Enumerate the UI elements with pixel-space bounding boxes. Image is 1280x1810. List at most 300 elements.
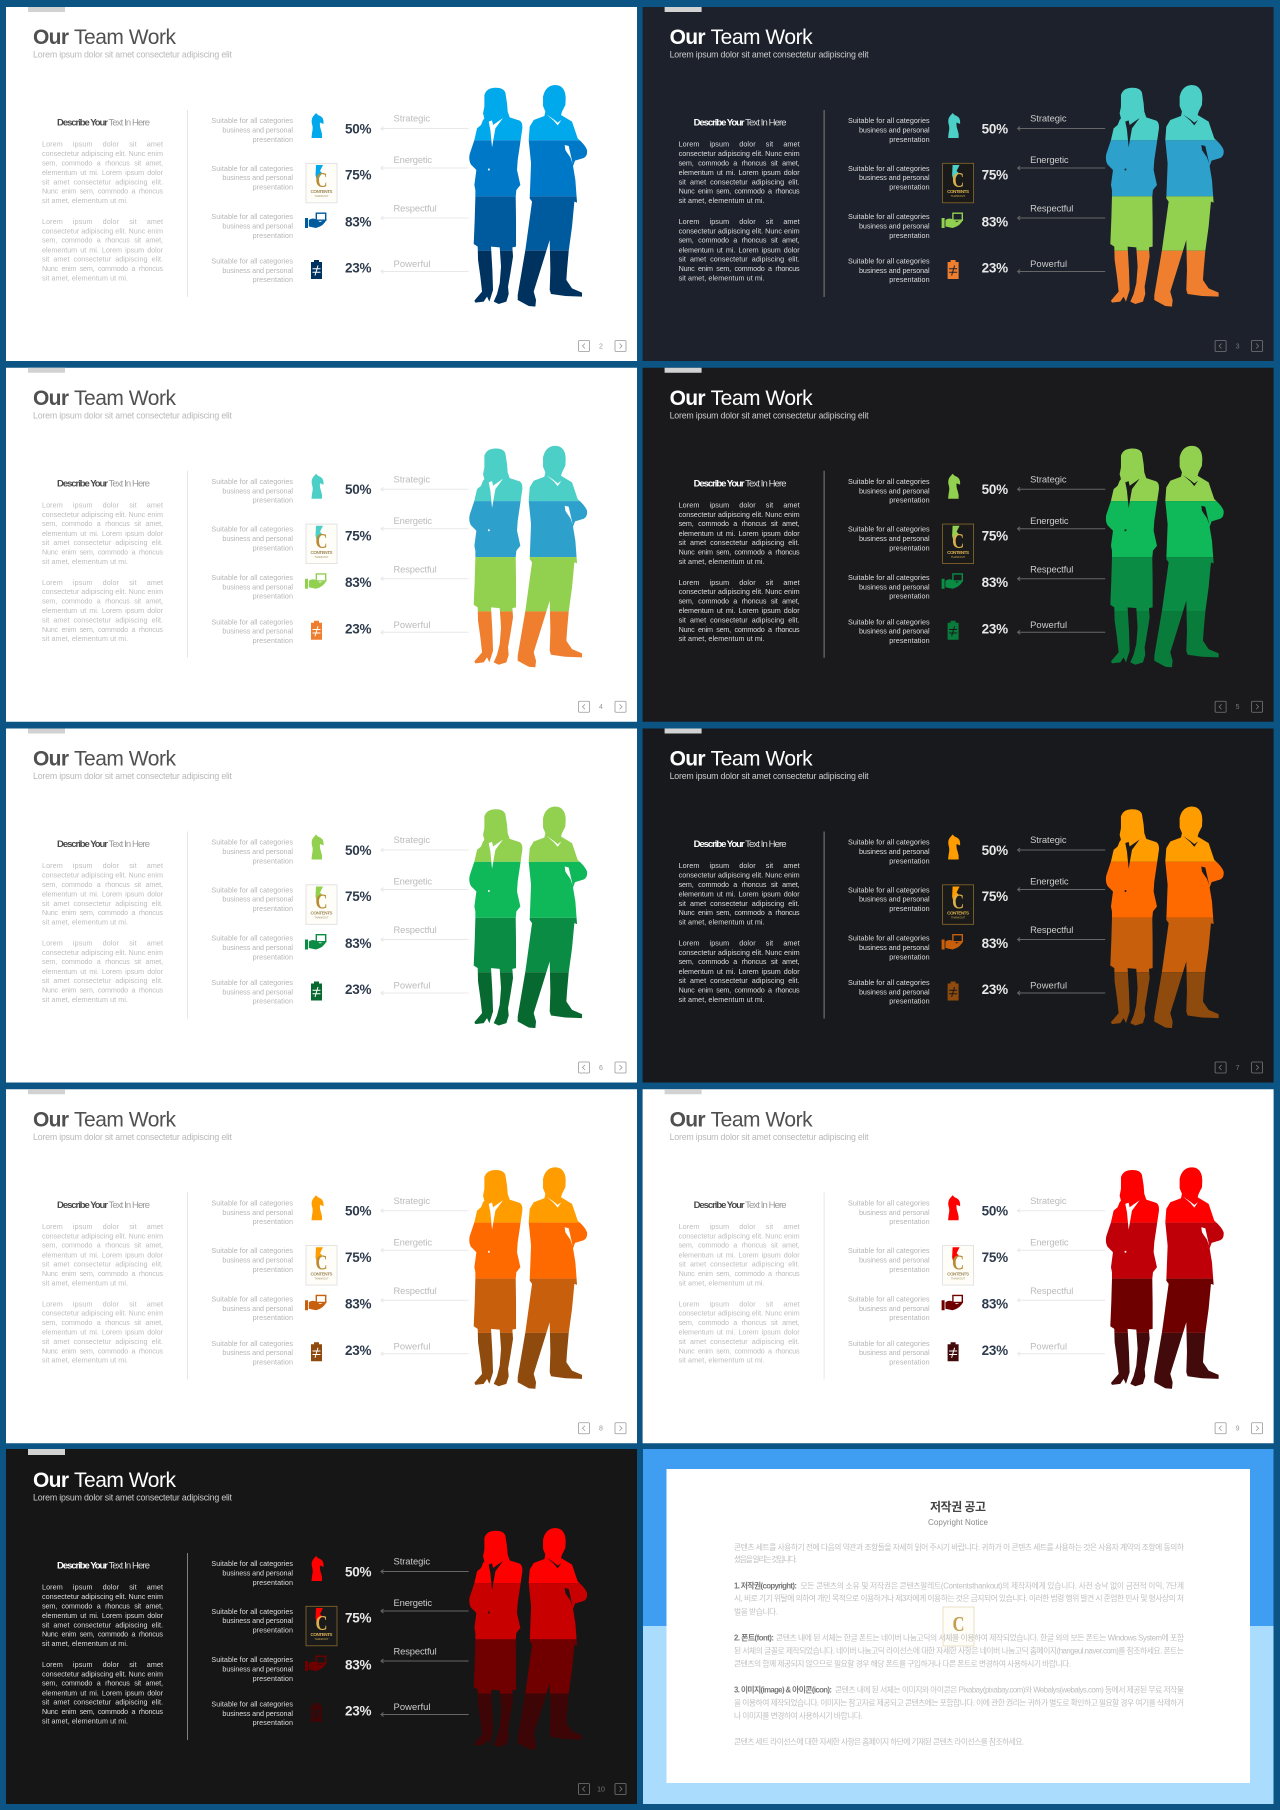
label: Energetic <box>1030 515 1069 526</box>
heading: Text In Here <box>108 1560 150 1572</box>
text block: sit amet consectetur adipiscing elit. <box>42 899 163 908</box>
heading: Text In Here <box>108 839 150 850</box>
text block: Nunc enim sem, commodo a rhoncus <box>42 1707 163 1716</box>
icon: battery <box>948 621 959 640</box>
text block: sit amet, elementum ut mi. <box>42 1639 128 1648</box>
icon: logo: CONTENTS <box>947 1271 969 1276</box>
title: Our <box>33 1469 69 1492</box>
text block: sem, commodo a rhoncus sit amet, <box>42 1601 163 1610</box>
icon: knight <box>312 113 324 138</box>
text block <box>679 500 800 643</box>
text block: sit amet consectetur adipiscing elit. <box>42 1620 163 1629</box>
row: Strategic <box>211 473 469 505</box>
text block <box>42 500 164 643</box>
text block: Lorem ipsum dolor sit amet <box>42 140 163 148</box>
icon: logo: C <box>316 890 328 914</box>
label: Respectful <box>1030 924 1073 935</box>
icon: logo: THANKOUT <box>951 916 966 920</box>
description <box>848 885 930 913</box>
heading: Text In Here <box>745 118 787 128</box>
subtitle: Lorem ipsum dolor sit amet consectetur adipiscing elit <box>670 410 869 420</box>
icon: hand <box>305 213 327 228</box>
text block: sit amet, elementum ut mi. <box>679 1278 765 1287</box>
text block: Lorem ipsum dolor sit amet <box>42 500 163 509</box>
pagination: 7 <box>1236 1065 1240 1072</box>
title: Our <box>670 26 706 49</box>
icon: knight <box>948 113 960 138</box>
text block: elementum ut mi. Lorem ipsum dolor <box>42 606 164 615</box>
icon: battery <box>948 1342 959 1361</box>
figure: businesspeople silhouettes <box>1106 446 1224 668</box>
text block: sem, commodo a rhoncus sit amet, <box>42 519 163 528</box>
percent: 83% <box>345 1297 372 1312</box>
description: presentation <box>253 1357 293 1366</box>
percent: 75% <box>982 168 1008 183</box>
label: Powerful <box>394 258 430 269</box>
row: Powerful <box>848 978 1105 1006</box>
row: Energetic <box>211 515 469 564</box>
arrow <box>381 527 469 531</box>
label: Powerful <box>1030 980 1067 990</box>
title: Our <box>670 387 706 410</box>
notice section 2: 2. 폰트(font): <box>734 1634 774 1643</box>
label: Respectful <box>394 1285 437 1296</box>
label: Respectful <box>394 203 437 214</box>
label: Energetic <box>394 1236 432 1247</box>
text block: sem, commodo a rhoncus sit amet, <box>679 957 800 966</box>
notice sheet <box>666 1469 1250 1783</box>
title: Team Work <box>74 387 176 410</box>
panel: slide 2 <box>6 7 637 361</box>
icon: hand <box>942 1295 963 1310</box>
description: Suitable for all categories <box>848 617 930 626</box>
text block: Nunc enim sem, commodo a rhoncus <box>679 625 800 634</box>
text block: sem, commodo a rhoncus sit amet, <box>679 158 800 167</box>
row: Respectful <box>848 924 1105 961</box>
arrow <box>381 1352 469 1356</box>
text block: Lorem ipsum dolor sit amet <box>42 1660 163 1669</box>
description: business and personal <box>859 534 930 543</box>
icon: knight <box>948 1195 960 1220</box>
pagination: 5 <box>1236 704 1240 711</box>
text block: sit amet consectetur adipiscing elit. <box>42 255 163 264</box>
description: presentation <box>889 997 930 1006</box>
panel: slide 8 <box>6 1089 637 1443</box>
text block: Lorem ipsum dolor sit amet <box>679 140 800 148</box>
heading: Text In Here <box>108 118 150 128</box>
description: Suitable for all categories <box>211 525 293 534</box>
icon: logo: C <box>316 1250 328 1274</box>
description: business and personal <box>222 1616 293 1625</box>
icon: hand <box>942 213 963 228</box>
text block: consectetur adipiscing elit. Nunc enim <box>42 870 163 880</box>
label: Strategic <box>394 473 430 484</box>
description: business and personal <box>222 173 293 182</box>
text block: Nunc enim sem, commodo a rhoncus <box>42 547 163 556</box>
panel: slide 5 <box>643 368 1274 722</box>
title: Team Work <box>74 1108 176 1131</box>
arrow <box>381 1712 469 1716</box>
description: Suitable for all categories <box>211 838 293 847</box>
text block: sit amet consectetur adipiscing elit. <box>42 1337 163 1346</box>
title: Team Work <box>711 387 813 410</box>
subtitle: Lorem ipsum dolor sit amet consectetur adipiscing elit <box>33 771 233 781</box>
icon: knight <box>948 834 960 860</box>
row: Respectful <box>211 924 469 961</box>
icon: logo: CONTENTS <box>310 1632 332 1637</box>
text block: consectetur adipiscing elit. Nunc enim <box>42 510 163 519</box>
label: Strategic <box>1030 112 1067 124</box>
description: Suitable for all categories <box>211 1655 293 1664</box>
notice intro: 콘텐츠 세트를 사용하기 전에 다음의 약관과 조항들을 자세히 읽어 주시기 바랍니다. 귀하가 이 콘텐츠 세트를 사용하는 것은 사용자 계약의 조항에 동의하 <box>734 1542 1184 1552</box>
title: Our <box>33 748 69 770</box>
arrow <box>1018 1209 1105 1213</box>
text block: sit amet, elementum ut mi. <box>42 995 128 1004</box>
description: business and personal <box>222 1568 293 1578</box>
label: Energetic <box>394 154 432 165</box>
notice section 1: 모든 콘텐츠의 소유 및 저작권은 콘텐츠팔레트(Contentsthankout)의 제작자에게 있습니다. 사전 승낙 없이 금전적 이익, 7단계 <box>800 1581 1184 1591</box>
subtitle: Lorem ipsum dolor sit amet consectetur adipiscing elit <box>670 1132 869 1142</box>
label: Respectful <box>1030 563 1073 574</box>
label: Strategic <box>1030 1195 1067 1206</box>
pagination <box>578 1062 626 1073</box>
arrow <box>381 1298 469 1302</box>
pagination: 10 <box>597 1786 605 1793</box>
icon: battery <box>948 982 959 1000</box>
panel: copyright notice <box>643 1449 1274 1804</box>
description: Suitable for all categories <box>211 212 293 221</box>
description: presentation <box>889 1313 930 1322</box>
row: Energetic <box>211 1597 469 1646</box>
description <box>211 838 293 865</box>
row: Energetic <box>211 876 469 924</box>
icon: logo <box>943 885 974 924</box>
panel: slide 7 <box>643 728 1274 1082</box>
title: Our <box>33 26 69 49</box>
text block: Nunc enim sem, commodo a rhoncus <box>679 264 800 273</box>
row: Respectful <box>848 563 1105 601</box>
text block: sem, commodo a rhoncus sit amet, <box>42 158 163 167</box>
arrow <box>1018 848 1105 852</box>
icon: knight <box>312 474 324 499</box>
icon: logo: THANKOUT <box>314 555 329 559</box>
text block: Lorem ipsum dolor sit amet <box>679 500 800 509</box>
description: business and personal <box>859 987 930 996</box>
slide background <box>6 7 637 361</box>
arrow <box>381 270 469 274</box>
arrow <box>1018 630 1105 634</box>
text block: Nunc enim sem, commodo a rhoncus <box>42 1630 163 1639</box>
text block: sit amet, elementum ut mi. <box>42 273 128 282</box>
heading <box>57 839 150 850</box>
text block: consectetur adipiscing elit. Nunc enim <box>42 948 163 957</box>
text block: sem, commodo a rhoncus sit amet, <box>679 1318 800 1327</box>
label: Energetic <box>1030 876 1069 886</box>
arrow <box>381 1248 469 1252</box>
percent: 50% <box>345 1564 372 1579</box>
icon: logo: C <box>952 1250 964 1274</box>
text block: sem, commodo a rhoncus sit amet, <box>679 1241 800 1250</box>
title: Team Work <box>711 26 813 49</box>
text block: sit amet, elementum ut mi. <box>679 557 765 566</box>
row: Strategic <box>848 1195 1105 1226</box>
description: Suitable for all categories <box>211 1294 293 1303</box>
text block: sit amet consectetur adipiscing elit. <box>679 255 800 264</box>
description: business and personal <box>222 1709 293 1718</box>
row: Energetic <box>848 154 1105 203</box>
text block: elementum ut mi. Lorem ipsum dolor <box>679 245 800 254</box>
notice section 1: 벌을 받습니다. <box>734 1607 778 1617</box>
arrow <box>1018 216 1105 220</box>
description <box>848 1198 930 1226</box>
icon: logo <box>306 1246 337 1285</box>
heading: Text In Here <box>108 478 150 489</box>
top tab <box>28 368 65 373</box>
description: presentation <box>889 182 930 192</box>
arrow <box>381 577 469 581</box>
text block: Nunc enim sem, commodo a rhoncus <box>679 908 800 917</box>
description: Suitable for all categories <box>848 838 930 847</box>
text block: sem, commodo a rhoncus sit amet, <box>679 596 800 605</box>
percent: 50% <box>345 482 372 497</box>
text block: sem, commodo a rhoncus sit amet, <box>42 880 163 889</box>
text block: consectetur adipiscing elit. Nunc enim <box>42 587 163 596</box>
text block: Lorem ipsum dolor sit amet <box>42 1299 163 1308</box>
text block: consectetur adipiscing elit. Nunc enim <box>679 1309 800 1318</box>
label: Strategic <box>394 1195 430 1206</box>
description <box>848 617 930 645</box>
description <box>211 164 293 192</box>
icon: logo: THANKOUT <box>314 1637 329 1641</box>
description: presentation <box>253 592 293 601</box>
text block: sit amet consectetur adipiscing elit. <box>42 177 163 186</box>
text block: consectetur adipiscing elit. Nunc enim <box>42 1592 163 1601</box>
row: Energetic <box>211 1236 469 1285</box>
top tab <box>28 1449 65 1455</box>
description: business and personal <box>859 266 930 275</box>
text block: consectetur adipiscing elit. Nunc enim <box>679 587 800 596</box>
description: business and personal <box>859 486 930 495</box>
description: presentation <box>253 182 293 192</box>
description <box>848 1294 930 1322</box>
description: business and personal <box>222 895 293 904</box>
description: Suitable for all categories <box>211 1339 293 1348</box>
text block: sem, commodo a rhoncus sit amet, <box>42 236 163 245</box>
pagination <box>1215 701 1263 712</box>
pagination: 4 <box>599 704 603 711</box>
notice section 1: 1. 저작권(copyright): <box>734 1581 797 1591</box>
row: Powerful <box>211 617 469 645</box>
notice intro <box>734 1542 1184 1564</box>
description: Suitable for all categories <box>211 116 293 125</box>
text block: sem, commodo a rhoncus sit amet, <box>42 957 163 966</box>
row: Respectful <box>211 1285 469 1322</box>
text block: Nunc enim sem, commodo a rhoncus <box>42 264 163 273</box>
icon: logo: C <box>316 529 328 553</box>
percent: 23% <box>345 982 372 997</box>
icon: logo: CONTENTS <box>310 550 332 555</box>
percent: 23% <box>982 261 1008 276</box>
description <box>848 256 930 284</box>
arrow <box>381 848 469 852</box>
description: Suitable for all categories <box>848 978 930 987</box>
panel: slide 9 <box>643 1089 1274 1443</box>
slide background <box>643 7 1274 361</box>
text block <box>679 861 800 1004</box>
arrow <box>1018 166 1105 170</box>
description <box>211 617 293 645</box>
description: presentation <box>253 1626 293 1634</box>
description: business and personal <box>222 1255 293 1264</box>
description: Suitable for all categories <box>211 1198 293 1207</box>
percent: 23% <box>982 621 1008 636</box>
row: Respectful <box>211 1646 469 1683</box>
text block: Lorem ipsum dolor sit amet <box>679 578 800 587</box>
text block: sit amet consectetur adipiscing elit. <box>42 615 163 624</box>
description: business and personal <box>222 582 293 591</box>
icon: logo: THANKOUT <box>314 1276 329 1280</box>
text block <box>42 1582 164 1725</box>
label: Powerful <box>1030 1340 1067 1351</box>
title: Team Work <box>74 26 176 49</box>
slide background <box>6 728 637 1082</box>
percent: 50% <box>982 843 1008 858</box>
arrow <box>1018 270 1105 274</box>
heading <box>57 1200 150 1211</box>
description: presentation <box>253 231 293 240</box>
icon: logo <box>306 1606 337 1646</box>
description: business and personal <box>859 1208 930 1217</box>
icon: logo <box>943 524 974 564</box>
description: Suitable for all categories <box>211 934 293 943</box>
text block: elementum ut mi. Lorem ipsum dolor <box>679 967 800 976</box>
description: Suitable for all categories <box>211 978 293 987</box>
slide background <box>6 368 637 722</box>
text block <box>42 140 164 282</box>
description: business and personal <box>222 534 293 543</box>
text block: Lorem ipsum dolor sit amet <box>42 217 163 226</box>
heading <box>694 839 787 850</box>
arrow <box>1018 527 1105 531</box>
icon: logo: CONTENTS <box>947 910 969 916</box>
label: Powerful <box>394 980 430 990</box>
icon: logo: THANKOUT <box>314 916 329 920</box>
icon: hand <box>305 935 327 950</box>
figure: businesspeople silhouettes <box>469 446 588 668</box>
text block: sit amet consectetur adipiscing elit. <box>679 615 800 624</box>
heading <box>57 1560 150 1572</box>
description: presentation <box>889 1217 930 1226</box>
icon: battery <box>311 621 322 640</box>
icon: logo: C <box>952 890 964 914</box>
label: Respectful <box>394 924 437 935</box>
text block: Nunc enim sem, commodo a rhoncus <box>42 1269 163 1278</box>
percent: 83% <box>982 936 1008 951</box>
arrow <box>381 991 469 995</box>
description <box>211 573 293 601</box>
description <box>211 934 293 961</box>
description: business and personal <box>859 895 930 904</box>
panel: slide 10 <box>6 1449 637 1804</box>
text block: sem, commodo a rhoncus sit amet, <box>42 1679 163 1688</box>
row: Powerful <box>211 978 469 1006</box>
pagination <box>1215 340 1263 352</box>
title: Team Work <box>711 748 813 770</box>
row: Strategic <box>211 1195 469 1226</box>
notice section 3: 콘텐츠 내에 된 서체는 이미지와 아이콘은 Pixabay(pixabay.com)와 Webalys(webalys.com) 등에서 제공된 무료 저작물 <box>835 1684 1184 1694</box>
icon: logo: C <box>316 168 328 192</box>
subtitle: Lorem ipsum dolor sit amet consectetur adipiscing elit <box>33 1492 233 1502</box>
icon: knight <box>312 1195 324 1220</box>
label: Powerful <box>1030 619 1067 630</box>
text block: elementum ut mi. Lorem ipsum dolor <box>42 1328 164 1337</box>
description: presentation <box>889 231 930 240</box>
icon: logo: CONTENTS <box>947 189 969 194</box>
label: Respectful <box>1030 203 1073 214</box>
arrow <box>381 487 469 491</box>
text block: Nunc enim sem, commodo a rhoncus <box>42 625 163 634</box>
top tab <box>665 7 702 12</box>
text block: sem, commodo a rhoncus sit amet, <box>679 236 800 245</box>
arrow <box>381 1570 469 1574</box>
description: presentation <box>253 904 293 913</box>
label: Strategic <box>1030 473 1067 484</box>
text block: Nunc enim sem, commodo a rhoncus <box>42 908 163 917</box>
row: Strategic <box>848 473 1105 505</box>
pagination: 8 <box>599 1426 603 1433</box>
heading: Describe Your <box>694 118 745 128</box>
icon: hand <box>942 935 963 950</box>
row: Energetic <box>848 1236 1105 1285</box>
percent: 75% <box>345 168 372 183</box>
row: Respectful <box>848 1285 1105 1322</box>
description: Suitable for all categories <box>211 256 293 266</box>
notice section 3: 3. 이미지(image) & 아이콘(icon): <box>734 1684 832 1694</box>
description <box>848 978 930 1006</box>
text block: Nunc enim sem, commodo a rhoncus <box>679 187 800 196</box>
icon: logo <box>943 1246 974 1285</box>
arrow <box>381 216 469 220</box>
text block: Lorem ipsum dolor sit amet <box>42 1582 163 1592</box>
label: Energetic <box>1030 1236 1069 1247</box>
icon: logo: C <box>952 529 964 553</box>
icon: knight <box>312 1556 324 1581</box>
label: Powerful <box>394 1701 430 1712</box>
icon: logo: THANKOUT <box>951 194 966 198</box>
text block: elementum ut mi. Lorem ipsum dolor <box>42 890 164 898</box>
percent: 75% <box>345 1250 372 1265</box>
description <box>211 116 293 144</box>
text block: sit amet consectetur adipiscing elit. <box>42 538 163 547</box>
heading: Text In Here <box>745 839 787 850</box>
text block: elementum ut mi. Lorem ipsum dolor <box>679 1328 800 1337</box>
label: Energetic <box>394 1597 432 1608</box>
description: presentation <box>889 543 930 552</box>
panel: slide 3 <box>643 7 1274 361</box>
description <box>211 477 293 505</box>
description: Suitable for all categories <box>211 1607 293 1616</box>
row: Respectful <box>211 563 469 601</box>
label: Strategic <box>1030 834 1067 845</box>
row: Powerful <box>848 617 1105 645</box>
description <box>848 525 930 552</box>
label: Strategic <box>394 1556 430 1566</box>
description: business and personal <box>859 943 930 952</box>
description: presentation <box>253 496 293 505</box>
text block: sit amet, elementum ut mi. <box>679 918 765 926</box>
text block: sit amet consectetur adipiscing elit. <box>679 1260 800 1269</box>
percent: 83% <box>345 214 372 229</box>
